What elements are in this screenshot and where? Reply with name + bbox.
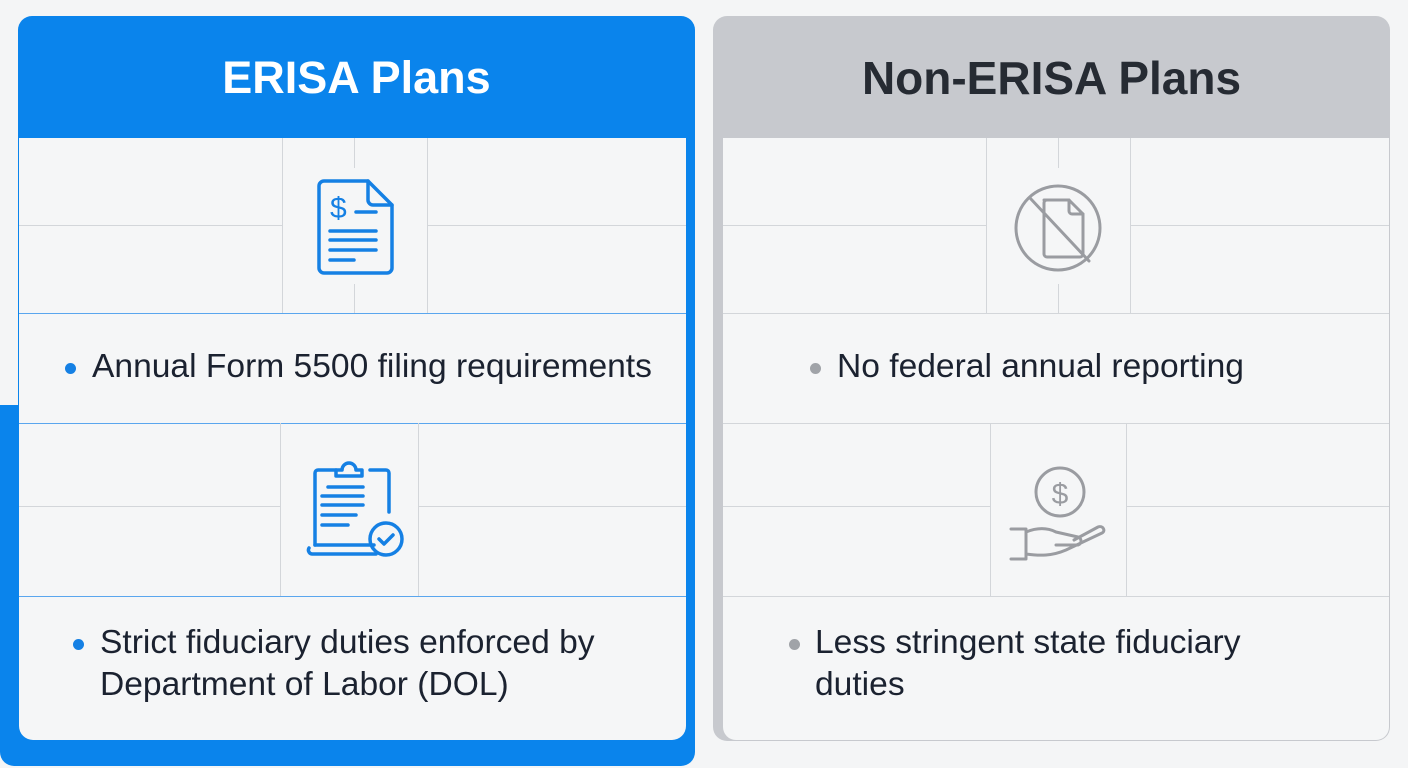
icon: dollar document: $ — [330, 192, 347, 225]
heading: Non-ERISA Plans: Non-ERISA Plans — [862, 52, 1241, 104]
panel: Non-ERISA plans — [713, 16, 1390, 741]
text: Strict fiduciary duties: Department of Labor (DOL) — [100, 666, 509, 703]
text: Strict fiduciary duties: Strict fiduciary duties enforced by — [100, 624, 595, 661]
text: Strict fiduciary duties — [73, 624, 595, 703]
text: No federal annual reporting: No federal annual reporting — [837, 348, 1244, 385]
panel: ERISA plans — [0, 16, 695, 766]
icon: dollar document — [317, 179, 394, 275]
icon: hand with coin — [1010, 466, 1106, 560]
icon: no document — [1014, 184, 1102, 272]
text: Annual Form 5500: Annual Form 5500 filing requirements — [92, 348, 652, 385]
icon: clipboard check — [306, 461, 404, 557]
text: Less stringent state fiduciary duties: Less stringent state fiduciary — [815, 624, 1241, 661]
icon: hand with coin: $ — [1052, 478, 1069, 511]
text: Less stringent state fiduciary duties: duties — [815, 666, 905, 703]
heading: ERISA Plans: ERISA Plans — [222, 52, 491, 103]
text: Less stringent state fiduciary duties — [789, 624, 1241, 703]
